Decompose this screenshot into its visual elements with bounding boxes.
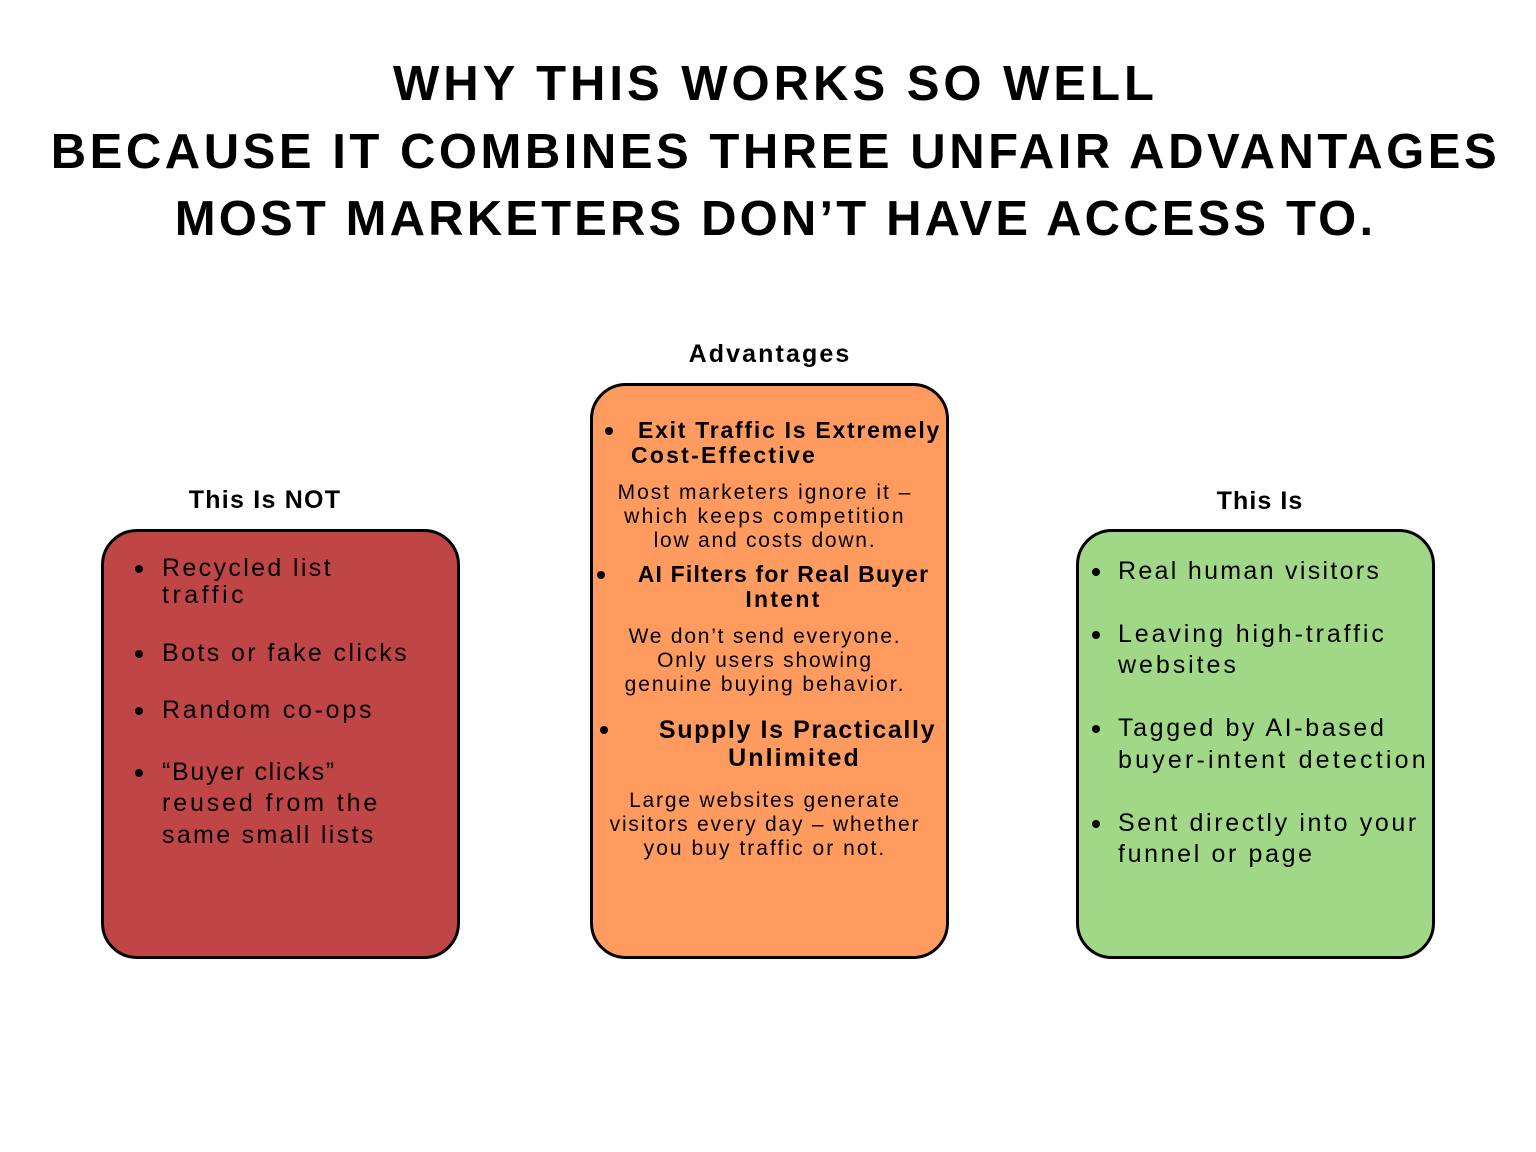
heading: This Is: This Is [1217, 487, 1303, 515]
panel: this is [1076, 529, 1435, 959]
list: this is items [1092, 557, 1429, 868]
panel: advantages [590, 383, 949, 959]
title: MOST MARKETERS DON’T HAVE ACCESS TO. [175, 192, 1376, 246]
list: advantages items: We don’t send everyone. [629, 625, 901, 648]
list: advantages items: AI Filters for Real Buyer [638, 561, 929, 587]
list: this is items: funnel or page [1118, 840, 1315, 868]
list: advantages items: genuine buying behavior. [625, 673, 905, 696]
list: advantages items: Large websites generate [629, 789, 901, 812]
list: this is items: Sent directly into your [1118, 809, 1419, 837]
panel: this is not [101, 529, 460, 959]
title: BECAUSE IT COMBINES THREE UNFAIR ADVANTAGES [51, 125, 1500, 179]
list: advantages items: Intent [745, 586, 822, 612]
list: this is not items: same small lists [162, 821, 376, 849]
list: advantages items: visitors every day – whether [610, 813, 920, 836]
list: this is items: Tagged by AI-based [1118, 714, 1387, 742]
list: this is not items: reused from the [162, 789, 380, 817]
list: advantages items: Most marketers ignore it – [618, 481, 912, 504]
list: this is not items: Bots or fake clicks [162, 639, 409, 667]
list: this is items: websites [1118, 651, 1239, 679]
list: advantages items: Exit Traffic Is Extremely [638, 417, 941, 443]
list: advantages items: Cost-Effective [631, 442, 817, 468]
list: advantages items: Only users showing [657, 649, 873, 672]
list: advantages items [597, 417, 941, 860]
list: this is items: Real human visitors [1118, 557, 1381, 585]
title [51, 57, 1500, 246]
list: this is items: buyer-intent detection [1118, 746, 1429, 774]
list: this is not items: “Buyer clicks” [162, 758, 336, 786]
list: this is not items: Recycled list [162, 554, 333, 582]
list: advantages items: Unlimited [728, 744, 861, 772]
list: advantages items: which keeps competition [624, 505, 906, 528]
list: this is not items [135, 554, 409, 849]
list: this is not items: traffic [162, 581, 247, 609]
list: advantages items: you buy traffic or not. [644, 837, 886, 860]
heading: Advantages: Advantages [689, 340, 851, 368]
title: WHY THIS WORKS SO WELL [393, 57, 1158, 111]
list: advantages items: Supply Is Practically [659, 716, 936, 744]
heading: This Is NOT: This Is NOT [189, 486, 341, 514]
list: this is items: Leaving high-traffic [1118, 620, 1387, 648]
list: advantages items: low and costs down. [654, 529, 876, 552]
list: this is not items: Random co-ops [162, 696, 374, 724]
